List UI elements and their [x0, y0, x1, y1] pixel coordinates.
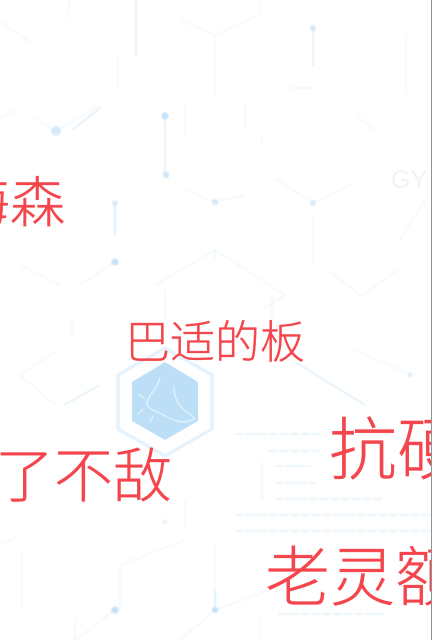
badge inner hexagon	[132, 362, 198, 440]
faint document text lines	[235, 434, 432, 614]
text: lower left label: 了不敌	[0, 444, 172, 510]
foot outline	[138, 378, 194, 422]
network nodes	[51, 25, 412, 614]
right edge line	[431, 0, 432, 640]
badge outer hexagon	[118, 348, 212, 456]
text: centre label: 巴适的板	[125, 317, 305, 368]
watermark letters: GY	[391, 166, 427, 194]
icon: foot in hexagon badge	[118, 348, 212, 456]
connector lines	[64, 0, 365, 610]
